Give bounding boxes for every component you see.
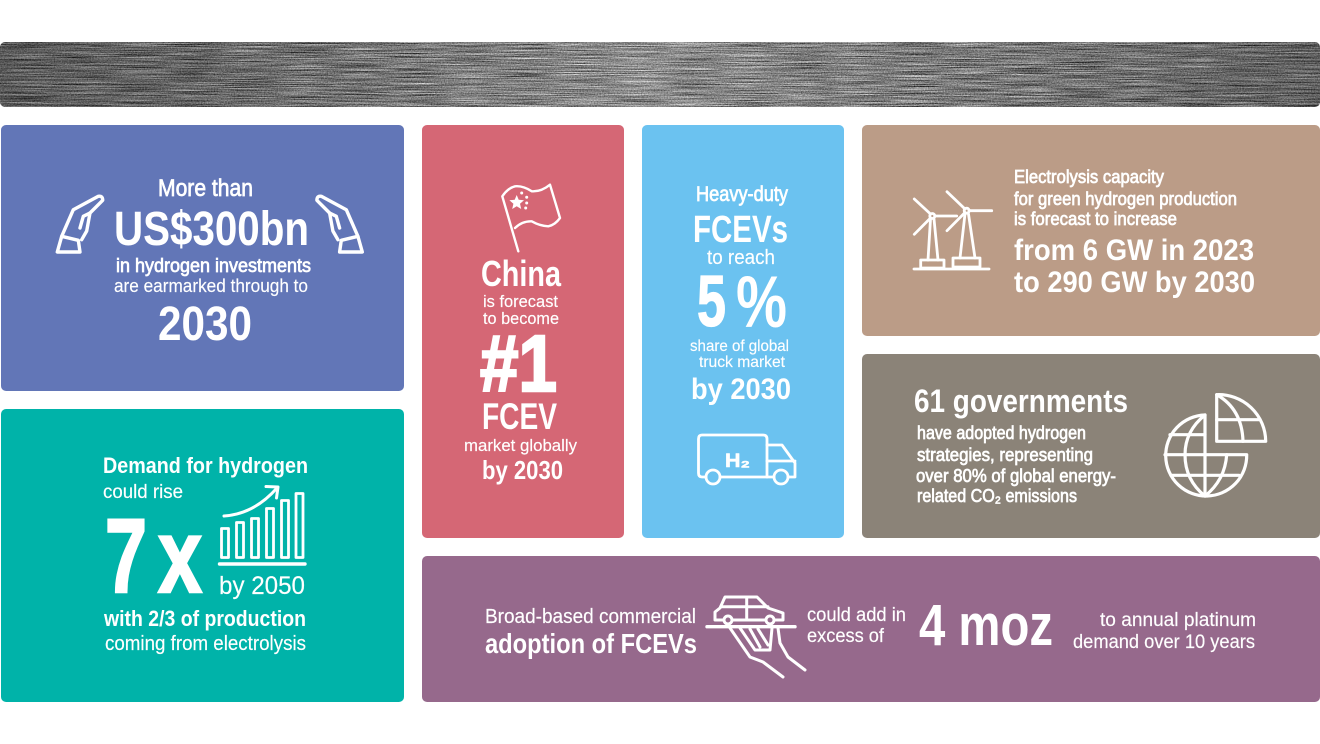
text: share of global: share of global xyxy=(690,338,789,355)
text: have adopted hydrogen: have adopted hydrogen xyxy=(917,423,1086,443)
text: truck market: truck market xyxy=(699,354,786,371)
panel: 61 governments xyxy=(862,354,1320,538)
figure: x: x xyxy=(158,498,202,615)
figure: from 6 GW in 2023: from 6 GW in 2023 xyxy=(1014,234,1254,267)
icon: globe xyxy=(1165,395,1266,496)
text: by 2050: by 2050 xyxy=(219,572,305,600)
banner: brushed metal strip xyxy=(0,42,1320,107)
text: by 2030: by 2030 xyxy=(482,455,563,485)
text: to annual platinum: to annual platinum xyxy=(1100,610,1256,631)
text: could add in: could add in xyxy=(807,605,906,626)
panel: China xyxy=(422,125,624,538)
heading: More than: More than xyxy=(158,175,253,202)
panel: demand for hydrogen xyxy=(1,409,404,702)
heading: 61 governments: 61 governments xyxy=(914,383,1128,419)
panel: US$300bn investments xyxy=(1,125,404,391)
text: strategies, representing: strategies, representing xyxy=(917,445,1093,465)
figure: #1: #1 xyxy=(480,319,557,408)
figure: percent sign: % xyxy=(736,262,787,343)
icon: hand holding car xyxy=(707,597,805,677)
figure: 4 moz: 4 moz xyxy=(919,593,1053,658)
text: in hydrogen investments: in hydrogen investments xyxy=(116,256,311,277)
figure: 2030: 2030 xyxy=(158,298,252,351)
heading: Heavy-duty: Heavy-duty xyxy=(696,183,788,206)
text: by 2030: by 2030 xyxy=(691,373,791,406)
text: to become: to become xyxy=(483,309,559,328)
heading: adoption of FCEVs: adoption of FCEVs xyxy=(485,628,697,659)
text: with 2/3 of production: with 2/3 of production xyxy=(103,606,306,631)
text: for green hydrogen production: for green hydrogen production xyxy=(1014,189,1237,209)
text: Broad-based commercial: Broad-based commercial xyxy=(485,606,696,628)
text: is forecast: is forecast xyxy=(483,292,558,311)
panel: electrolysis capacity xyxy=(862,125,1320,336)
icon: right hand xyxy=(317,196,362,252)
icon: left hand xyxy=(57,196,103,252)
figure: 7: 7 xyxy=(105,498,147,615)
icon: China flag xyxy=(502,185,560,251)
icon: rising bar chart xyxy=(220,486,305,564)
figure: 5: 5 xyxy=(697,262,726,342)
text: related CO2 emissions: related CO₂ emissions xyxy=(917,486,1077,506)
text: Electrolysis capacity: Electrolysis capacity xyxy=(1014,167,1164,187)
text: to reach: to reach xyxy=(707,247,775,269)
panel: broad-based adoption xyxy=(422,556,1320,702)
icon: wind turbines xyxy=(914,192,992,269)
text: are earmarked through to: are earmarked through to xyxy=(114,276,308,296)
figure: to 290 GW by 2030: to 290 GW by 2030 xyxy=(1014,266,1255,299)
text: coming from electrolysis: coming from electrolysis xyxy=(105,633,306,655)
icon: hydrogen truck xyxy=(698,435,795,484)
text: demand over 10 years: demand over 10 years xyxy=(1073,632,1255,653)
text: market globally: market globally xyxy=(464,436,577,455)
text: is forecast to increase: is forecast to increase xyxy=(1014,209,1177,229)
heading: Demand for hydrogen: Demand for hydrogen xyxy=(103,453,308,478)
text: excess of: excess of xyxy=(807,626,885,647)
figure: US$300bn: US$300bn xyxy=(114,203,309,256)
panel: heavy-duty FCEVs xyxy=(642,125,844,538)
text: over 80% of global energy-: over 80% of global energy- xyxy=(916,466,1116,486)
text: could rise: could rise xyxy=(103,482,183,503)
heading: FCEV: FCEV xyxy=(482,396,557,437)
heading: FCEVs: FCEVs xyxy=(693,209,788,251)
heading: China: China xyxy=(481,253,562,294)
icon: hydrogen truck: H₂ xyxy=(725,451,750,472)
